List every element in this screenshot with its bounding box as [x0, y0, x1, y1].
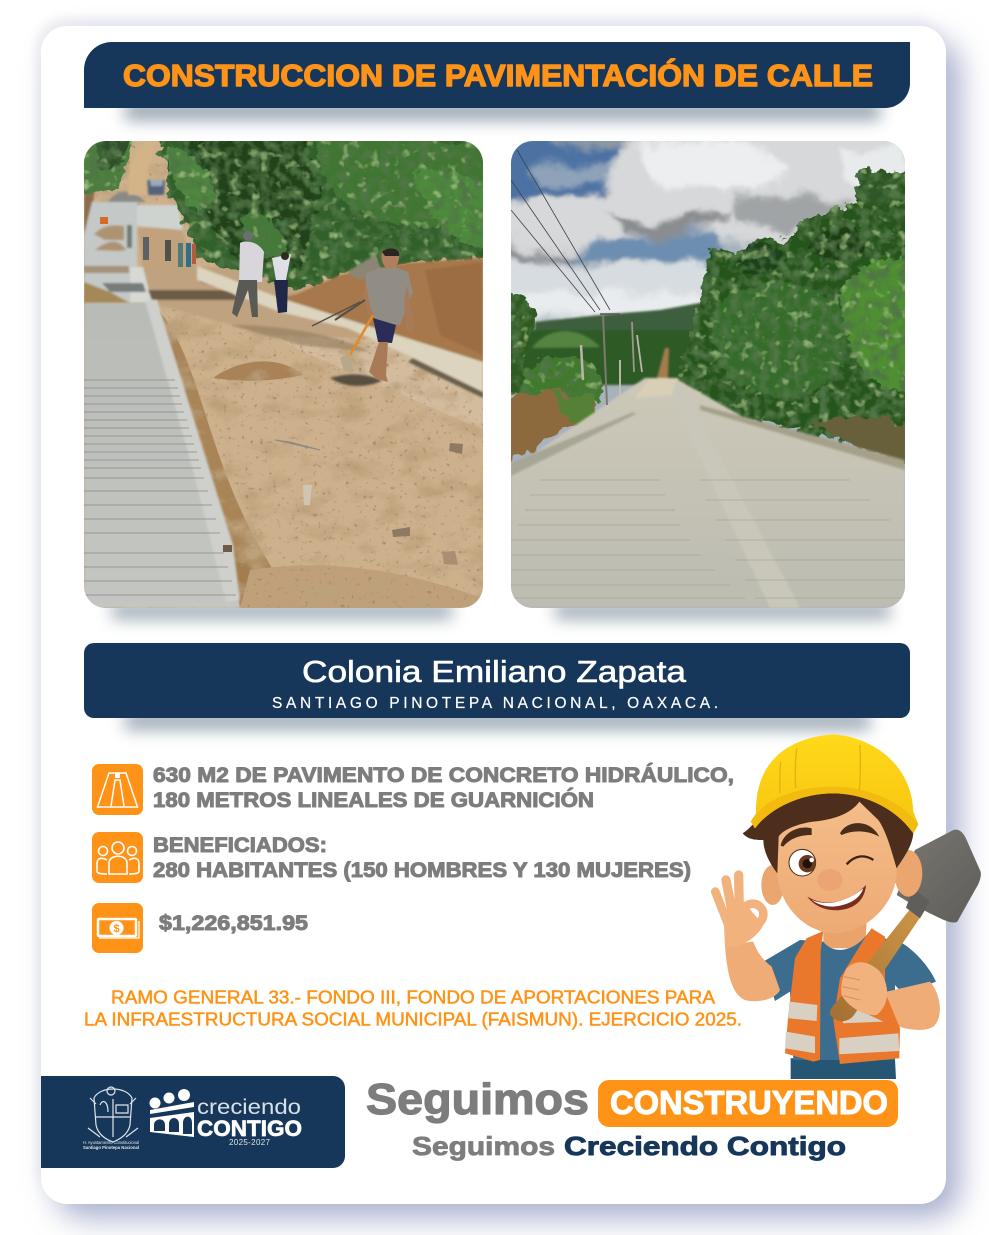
hair: [743, 793, 913, 873]
funding source: RAMO GENERAL 33.- FONDO III, FONDO DE APORTACIONES PARA: [111, 988, 715, 1008]
slogan: seguimos creciendo contigo: Seguimos: [412, 1131, 555, 1161]
embankment: [280, 258, 483, 362]
open eye: [789, 849, 816, 876]
slogan: seguimos construyendo: [366, 1075, 898, 1127]
face: [777, 798, 897, 933]
wires and poles: [511, 150, 642, 405]
photo shadows: [112, 603, 890, 619]
beneficiaries text: BENEFICIADOS:: [153, 834, 327, 857]
slogan: seguimos construyendo: Seguimos: [366, 1075, 589, 1124]
hand OK sign: [715, 875, 763, 925]
shovel blade: [897, 830, 981, 923]
worker with dark trousers: [272, 252, 291, 313]
far road and car: [128, 141, 157, 195]
crest caption: H. Ayuntamiento Constitucional: [83, 1140, 139, 1145]
left bank: [511, 388, 597, 462]
photo: workers building the road: [75, 130, 495, 608]
logo panel: [41, 1076, 345, 1168]
ears: [761, 865, 784, 905]
right tree mass: [675, 160, 915, 470]
helmet: [751, 734, 918, 833]
sky and clouds: [511, 141, 905, 323]
neck: [823, 922, 867, 948]
far slabs and dirt: [138, 228, 197, 267]
hand holding handle: [841, 962, 887, 1015]
trousers: [791, 1058, 896, 1079]
raised arm: [725, 942, 780, 1001]
winking eye: [847, 856, 873, 864]
icon: municipal crest: [88, 1087, 138, 1142]
logo panel: 2025-2027: [229, 1138, 271, 1147]
slogan: seguimos construyendo: CONSTRUYENDO: [610, 1084, 888, 1121]
funding source: LA INFRAESTRUCTURA SOCIAL MUNICIPAL (FAISMUN). EJERCICIO 2025.: [84, 1010, 742, 1030]
worker mascot: [715, 734, 981, 1079]
title: CONSTRUCCION DE PAVIMENTACIÓN DE CALLE: [123, 57, 873, 93]
main slab: [84, 303, 240, 608]
header banner: [84, 42, 910, 120]
curb: [197, 266, 483, 392]
pavement text: 630 M2 DE PAVIMENTO DE CONCRETO HIDRÁULICO,: [153, 764, 734, 787]
far workers: [100, 217, 196, 267]
beneficiaries text: [153, 834, 691, 882]
icon: money: [92, 903, 143, 953]
location name: Colonia Emiliano Zapata: [302, 654, 687, 689]
funding source: [84, 988, 742, 1030]
crest caption: Santiago Pinotepa Nacional: [83, 1145, 139, 1150]
smile: [807, 885, 866, 910]
worker with shovel: [312, 249, 415, 382]
curbs: [511, 412, 636, 476]
location banner: [84, 643, 910, 730]
left vegetation: [511, 292, 604, 404]
rocks: [223, 440, 463, 565]
pavement text: 180 METROS LINEALES DE GUARNICIÓN: [153, 788, 594, 812]
icon: people: [92, 832, 143, 883]
investment amount: $1,226,851.95: [159, 912, 308, 935]
shirt: [763, 935, 936, 1060]
beneficiaries text: 280 HABITANTES (150 HOMBRES Y 130 MUJERES): [153, 859, 691, 882]
icon: creciendo contigo arches: [150, 1089, 194, 1137]
logo wordmark: creciendo: [197, 1096, 301, 1119]
worker in white: [232, 231, 264, 317]
eyebrows: [781, 827, 812, 847]
road grooves: [511, 480, 905, 598]
trees: [156, 130, 495, 290]
dirt ground: [84, 141, 483, 608]
nose: [817, 869, 843, 891]
slogan: seguimos creciendo contigo: Creciendo Contigo: [564, 1131, 846, 1161]
handle: [830, 908, 920, 1021]
photo: finished road: [511, 141, 905, 608]
logo panel: CONTIGO: [197, 1116, 302, 1141]
icon: road: [92, 764, 143, 815]
concrete grooves: [84, 380, 236, 595]
icon: money: $: [113, 923, 120, 935]
distant hills: [522, 301, 701, 387]
forearm on shovel: [873, 982, 940, 1030]
vest: [785, 931, 823, 1062]
road surface: [511, 378, 905, 608]
municipality: SANTIAGO PINOTEPA NACIONAL, OAXACA.: [272, 695, 718, 712]
crest caption: [83, 1140, 139, 1150]
slogan: seguimos creciendo contigo: [412, 1131, 846, 1161]
pavement text: [153, 764, 734, 812]
